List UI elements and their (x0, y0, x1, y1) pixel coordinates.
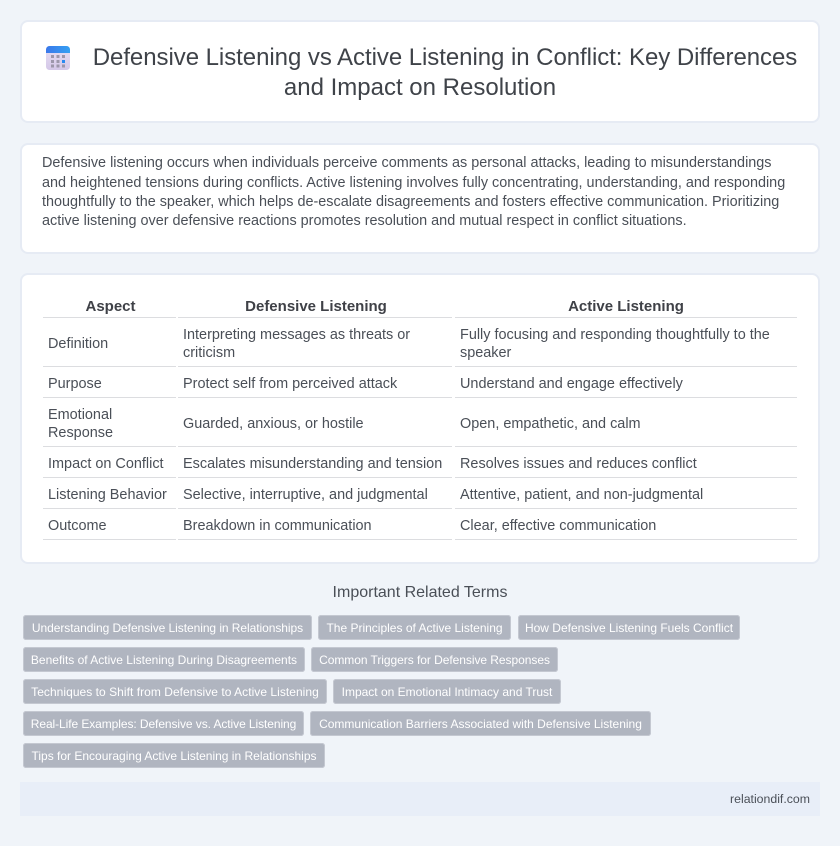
table lines (43, 317, 797, 540)
row: Purpose: Purpose (48, 376, 102, 392)
row: Purpose: Understand and engage effectively (460, 376, 683, 392)
intro text: thoughtfully to the speaker, which helps de-escalate disagreements and fosters effective communication. Prioritizing (42, 194, 779, 210)
row: Listening Behavior (48, 487, 703, 503)
row: Outcome: Clear, effective communication (460, 518, 656, 534)
row: Outcome: Breakdown in communication (183, 518, 372, 534)
row: Emotional Response: Emotional (48, 407, 112, 423)
footer: relationdif.com (730, 792, 810, 806)
row: Purpose (48, 376, 683, 392)
row: Purpose: Protect self from perceived attack (183, 376, 397, 392)
related term tags: Benefits of Active Listening During Disagreements (31, 653, 297, 667)
row: Emotional Response (48, 407, 641, 441)
panel: intro (20, 143, 820, 254)
related term tags: The Principles of Active Listening (326, 621, 503, 635)
related term tags: How Defensive Listening Fuels Conflict (525, 621, 733, 635)
intro text (42, 155, 785, 229)
row: Listening Behavior: Listening Behavior (48, 487, 167, 503)
row: Definition: Definition (48, 336, 108, 352)
icon: calendar (46, 46, 70, 70)
row: Definition (48, 327, 770, 361)
row: Emotional Response: Open, empathetic, and calm (460, 416, 641, 432)
related term tags: Real-Life Examples: Defensive vs. Active Listening (31, 717, 296, 731)
row: Listening Behavior: Selective, interruptive, and judgmental (183, 487, 428, 503)
row: Emotional Response: Guarded, anxious, or hostile (183, 416, 364, 432)
row: Definition: Fully focusing and responding thoughtfully to the (460, 327, 770, 343)
table header: Defensive Listening (245, 298, 387, 315)
related term tags: Communication Barriers Associated with Defensive Listening (319, 717, 642, 731)
row: Impact on Conflict: Escalates misunderstanding and tension (183, 456, 442, 472)
related term tags: Impact on Emotional Intimacy and Trust (342, 685, 552, 699)
related term tags: Techniques to Shift from Defensive to Active Listening (31, 685, 319, 699)
related term tags: Understanding Defensive Listening in Relationships (32, 621, 303, 635)
table header: Active Listening (568, 298, 684, 315)
intro text: active listening over defensive reactions promotes resolution and mutual respect in conflict situations. (42, 213, 687, 229)
footer (20, 782, 820, 816)
title: and Impact on Resolution (284, 74, 556, 101)
related term tags (23, 615, 740, 768)
intro text: and heightened tensions during conflicts. Active listening involves fully concentrating, understanding, and responding (42, 175, 785, 191)
row: Impact on Conflict: Resolves issues and reduces conflict (460, 456, 697, 472)
table header: Aspect (85, 298, 136, 315)
row: Outcome (48, 518, 656, 534)
title: Defensive Listening vs Active Listening in Conflict: Key Differences (93, 44, 797, 71)
panel: header (20, 20, 820, 123)
row: Definition: criticism (183, 345, 235, 361)
row: Impact on Conflict (48, 456, 697, 472)
row: Definition: Interpreting messages as threats or (183, 327, 410, 343)
row: Definition: speaker (460, 345, 511, 361)
intro text: Defensive listening occurs when individuals perceive comments as personal attacks, leading to misunderstandings (42, 155, 772, 171)
related term tags: Common Triggers for Defensive Responses (319, 653, 550, 667)
heading: related terms: Important Related Terms (333, 584, 507, 601)
row: Emotional Response: Response (48, 425, 113, 441)
row: Impact on Conflict: Impact on Conflict (48, 456, 164, 472)
table header (85, 298, 684, 315)
related term tags: Tips for Encouraging Active Listening in Relationships (31, 749, 317, 763)
panel: comparison table (20, 273, 820, 564)
row: Listening Behavior: Attentive, patient, and non-judgmental (460, 487, 703, 503)
row: Outcome: Outcome (48, 518, 107, 534)
title (93, 44, 797, 101)
